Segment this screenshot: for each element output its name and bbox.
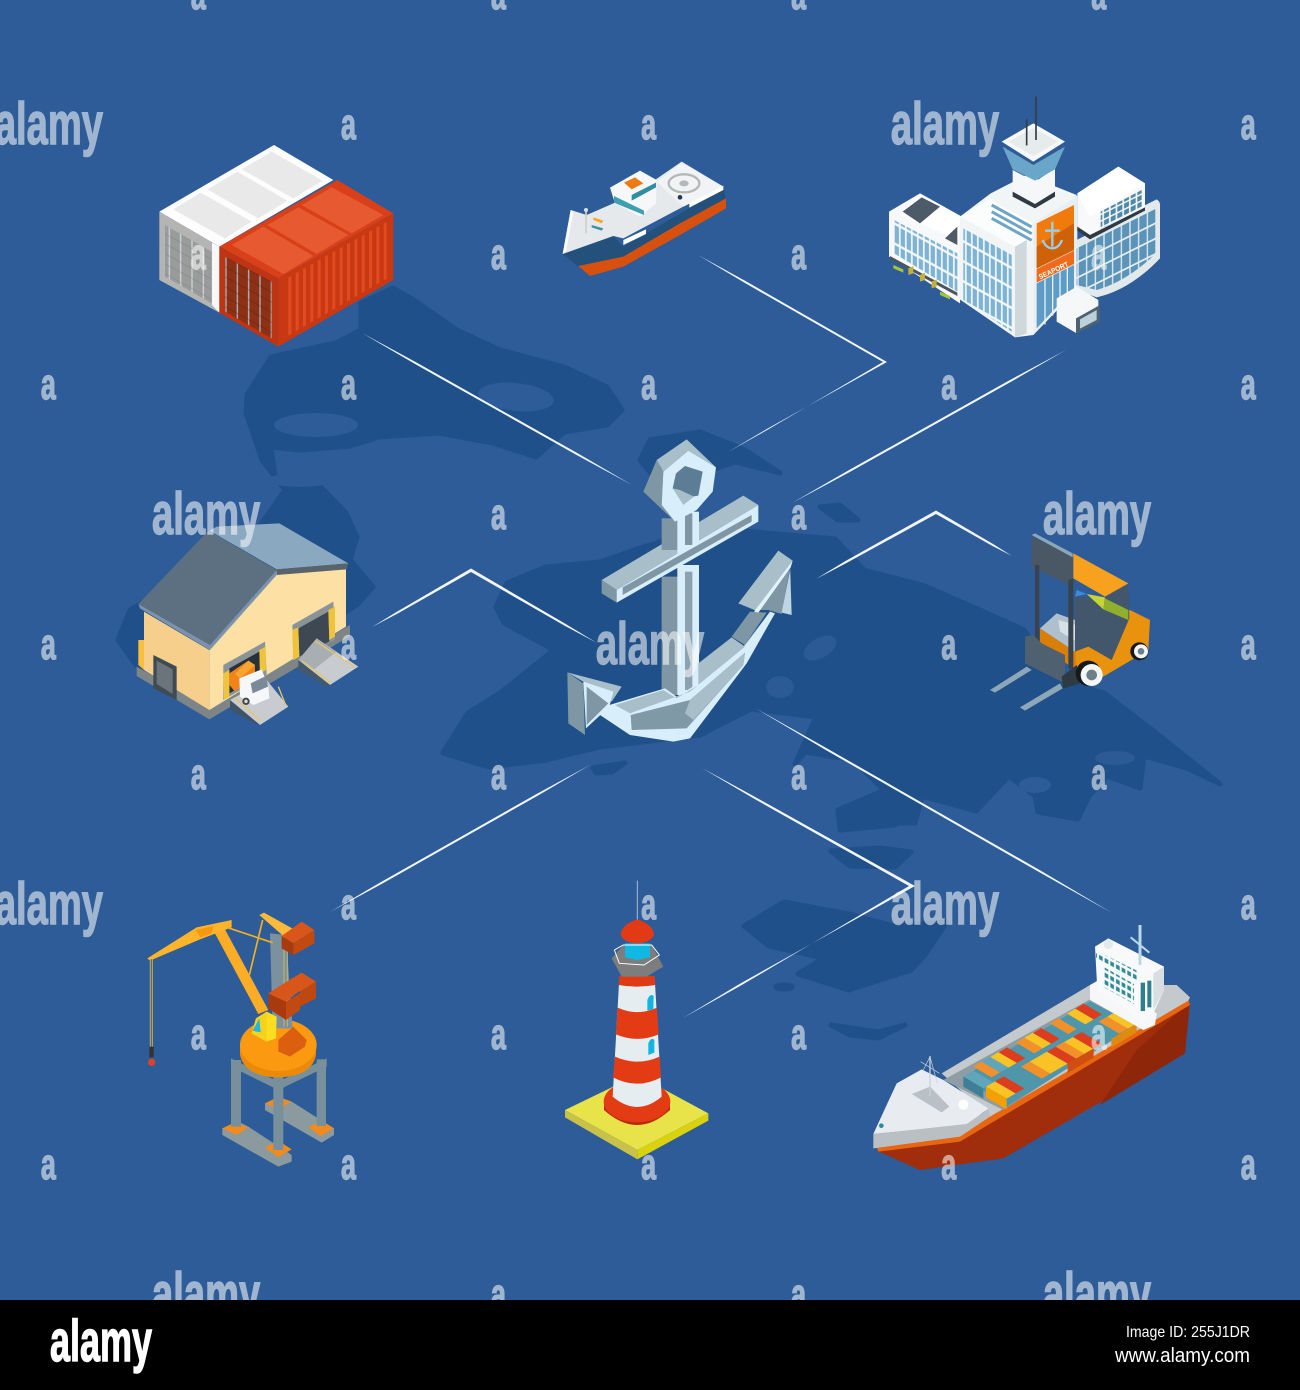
icon: central anchor xyxy=(567,439,793,742)
banner anchor xyxy=(1043,222,1062,248)
gallery xyxy=(612,943,663,977)
counterweight block upper xyxy=(282,922,314,955)
watermarks: aa xyxy=(491,489,807,539)
watermarks: aaaaa xyxy=(41,1139,1256,1189)
connector lines xyxy=(330,255,1112,1018)
turntable xyxy=(240,1019,317,1077)
central block and banner xyxy=(958,175,1077,337)
right wing xyxy=(1057,167,1160,334)
counterweight block lower xyxy=(268,973,316,1020)
watermarks: alamy xyxy=(152,481,261,547)
right fluke xyxy=(738,551,793,615)
image id: Image ID: 255J1DR xyxy=(1126,1324,1250,1341)
turntable hump xyxy=(278,1027,307,1057)
watermarks: alamy xyxy=(891,871,999,937)
watermarks: aa xyxy=(491,1269,807,1319)
website: www.alamy.com xyxy=(1114,1345,1250,1367)
dock bay right with ramp xyxy=(292,602,358,687)
watermarks: aaa xyxy=(341,99,1256,149)
watermarks: alamy xyxy=(1043,481,1151,547)
dock bay left with ramp xyxy=(223,642,288,725)
icon: lighthouse xyxy=(565,881,708,1159)
map lakes and bays xyxy=(268,379,1135,793)
footer bar xyxy=(0,1300,1300,1390)
tower xyxy=(613,976,662,1107)
upper jib xyxy=(259,913,294,936)
crossbar front xyxy=(617,505,758,603)
container rows xyxy=(963,1002,1137,1109)
watermarks: alamy xyxy=(152,1261,261,1327)
truck xyxy=(229,661,269,705)
arms xyxy=(600,612,775,742)
watermarks: aaaa xyxy=(191,229,1107,279)
watermarks: alamy xyxy=(891,91,999,157)
watermarks: aaaa xyxy=(41,619,1256,669)
operator cab xyxy=(252,1012,277,1042)
front wheel xyxy=(1076,661,1103,686)
ring xyxy=(643,439,716,522)
world map silhouette xyxy=(118,288,1220,1038)
front door xyxy=(153,655,177,700)
dome and rod xyxy=(621,881,654,943)
footer logo: alamy xyxy=(50,1309,152,1374)
watermarks: aaa xyxy=(341,879,1256,929)
icon: container cargo ship xyxy=(873,925,1190,1170)
icon: shipping containers xyxy=(159,145,393,347)
icon: harbour crane xyxy=(147,913,334,1167)
control tower xyxy=(1002,97,1065,208)
icon: forklift xyxy=(990,533,1150,711)
left fluke xyxy=(567,672,622,735)
icon: seaport terminal building xyxy=(889,97,1160,337)
bow mast xyxy=(879,1056,968,1128)
crossbar top xyxy=(602,496,758,590)
watermarks: aaaa xyxy=(191,1009,1107,1059)
boom and arm xyxy=(147,920,273,1014)
icon: patrol ferry boat xyxy=(563,162,726,276)
rear wheel xyxy=(1130,642,1148,660)
watermarks: aaaa xyxy=(191,749,1107,799)
tower mast xyxy=(270,933,293,1028)
watermarks: aaaaa xyxy=(41,359,1256,409)
decks xyxy=(873,985,1190,1148)
left wing xyxy=(889,193,962,303)
banner label: SEAPORT xyxy=(1038,261,1070,281)
shank xyxy=(662,512,699,695)
hook and cable xyxy=(148,959,155,1066)
hull xyxy=(877,999,1190,1170)
bridge superstructure xyxy=(1090,925,1164,1030)
icon: warehouse with truck xyxy=(137,523,358,725)
watermarks: alamy xyxy=(1043,1261,1151,1327)
watermarks: alamy xyxy=(596,611,704,677)
pedestal and legs xyxy=(222,1058,334,1167)
